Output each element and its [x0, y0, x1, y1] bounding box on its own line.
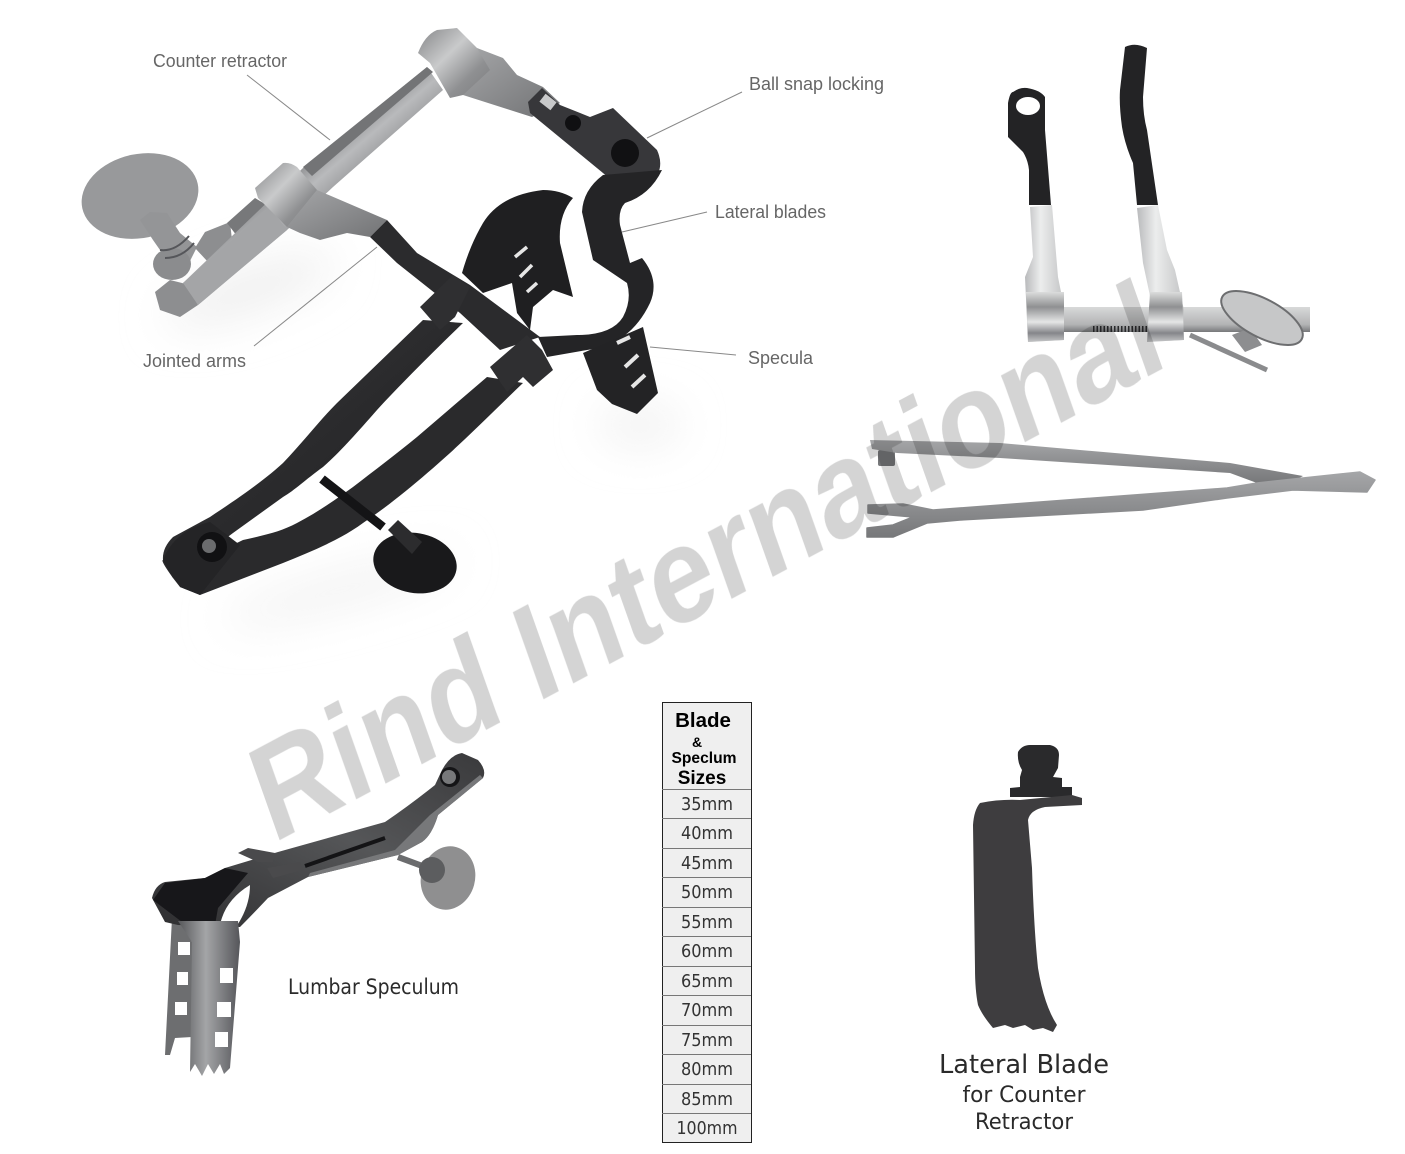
callout: Counter retractor: Counter retractor	[153, 51, 287, 71]
speculum back blade	[165, 918, 192, 1055]
label: Lateral Blade for Counter Retractor	[939, 1050, 1109, 1135]
table: blade and speculum sizes	[662, 702, 752, 1142]
blade knob	[1010, 745, 1072, 797]
table size values	[676, 795, 738, 1139]
panel: lumbar speculum photo	[152, 753, 484, 1076]
black screw and thumb disc	[322, 479, 462, 600]
handle clips	[238, 848, 303, 878]
callout: Jointed arms: Jointed arms	[143, 351, 246, 371]
silver top clamp and arm	[418, 28, 560, 117]
table size values: 50mm	[681, 883, 733, 903]
slotted pivot screw	[440, 767, 460, 787]
table size values: 60mm	[681, 942, 733, 962]
speculum front blade	[178, 921, 240, 1076]
black lower speculum	[583, 327, 658, 414]
table size values: 75mm	[681, 1031, 733, 1051]
label: Lateral Blade for Counter Retractor: Lateral Blade	[939, 1050, 1109, 1080]
table header: Speclum	[672, 750, 736, 767]
white opening in ring	[220, 885, 250, 925]
table size values: 65mm	[681, 972, 733, 992]
label: Lateral Blade for Counter Retractor: Retractor	[975, 1110, 1074, 1135]
callout: Ball snap locking	[647, 74, 884, 138]
callout: Specula: Specula	[748, 348, 814, 368]
callout: Specula	[650, 347, 814, 368]
forceps lower arm	[867, 472, 1375, 537]
thumb disc and screw	[398, 840, 482, 916]
hole in left blade	[1016, 97, 1040, 115]
blade body	[973, 795, 1082, 1032]
black jointed arms and handles	[162, 220, 553, 595]
callout: Lateral blades: Lateral blades	[715, 202, 826, 222]
silver front clamp and jointed arm	[255, 163, 387, 240]
table size values: 40mm	[681, 824, 733, 844]
back blade windows	[175, 942, 190, 1015]
watermark: Rind International	[232, 250, 1180, 871]
callout: Jointed arms	[143, 247, 377, 371]
silver retractor arms	[1025, 205, 1184, 342]
lower handle highlight and slit	[305, 775, 483, 877]
table size values: 45mm	[681, 854, 733, 874]
panel: main counter retractor illustration	[74, 28, 680, 635]
label: Lumbar Speculum: Lumbar Speculum	[288, 975, 459, 999]
speculum handle and bowl	[152, 753, 484, 927]
table size values: 35mm	[681, 795, 733, 815]
thumb disc and lever	[1190, 280, 1311, 370]
table header: Blade	[675, 709, 731, 732]
black lateral blade and speculum ring	[538, 170, 662, 357]
table size values: 100mm	[676, 1119, 738, 1139]
forceps upper arm	[870, 440, 1303, 483]
label: Lateral Blade for Counter Retractor: for Counter	[962, 1083, 1086, 1108]
right black curved blade	[1120, 45, 1158, 205]
callout: Ball snap locking: Ball snap locking	[749, 74, 884, 94]
panel: lateral blade photo	[973, 745, 1082, 1032]
table size values: 55mm	[681, 913, 733, 933]
silver counter retractor bar	[155, 67, 443, 317]
panel: forceps photo	[867, 440, 1375, 537]
table header	[672, 709, 736, 789]
callout: Lateral blades	[622, 202, 826, 232]
silver rack bar	[1060, 307, 1310, 332]
dark inner bowl	[153, 868, 248, 925]
left black blade	[1008, 88, 1051, 205]
table size values: 70mm	[681, 1001, 733, 1021]
table header: &	[692, 734, 702, 750]
black upper speculum	[462, 190, 573, 330]
table header: Sizes	[678, 768, 726, 789]
table size values: 80mm	[681, 1060, 733, 1080]
panel: upper right retractor photo	[1008, 45, 1311, 370]
front blade windows	[215, 968, 233, 1047]
soft floor shadows	[158, 239, 680, 635]
callout: Counter retractor	[153, 51, 330, 140]
ball snap locking hinge	[528, 88, 660, 188]
icon: silver adjusting disc and post	[74, 143, 206, 280]
table size values: 85mm	[681, 1090, 733, 1110]
